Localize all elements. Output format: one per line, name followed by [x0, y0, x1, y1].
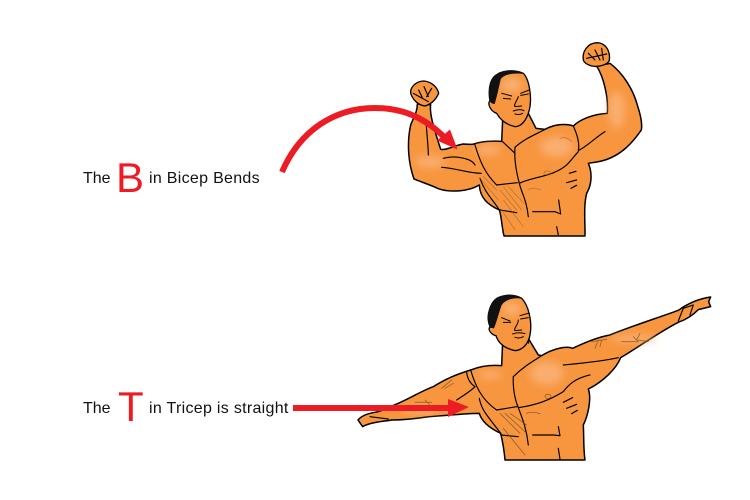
muscle lines — [413, 48, 607, 235]
highlights — [403, 334, 657, 413]
torso and arms silhouette — [408, 63, 642, 236]
caption: bicep — [83, 154, 260, 201]
caption: tricep: T — [118, 383, 144, 430]
caption: tricep: The — [83, 400, 111, 417]
hair — [488, 294, 523, 328]
vein and shading lines — [415, 333, 648, 455]
face highlight — [502, 78, 522, 92]
face features — [502, 90, 529, 115]
straight arrow to tricep — [293, 399, 469, 417]
highlights — [415, 92, 625, 168]
caption: bicep: B — [116, 154, 144, 201]
face highlight — [502, 302, 521, 316]
figure: bodybuilder with arms straight — [358, 294, 711, 460]
caption: tricep — [83, 383, 289, 430]
torso and straight arms silhouette — [358, 297, 711, 460]
caption: tricep: in Tricep is straight — [149, 400, 289, 417]
figure: bodybuilder flexing biceps — [408, 43, 642, 236]
caption: bicep: The — [83, 170, 111, 187]
hair — [489, 71, 524, 104]
head — [489, 71, 530, 127]
icon: right raised fist — [583, 43, 610, 66]
curved arrow to bicep — [282, 108, 458, 172]
face features — [502, 313, 530, 343]
head — [488, 294, 531, 351]
chest shading — [480, 138, 572, 230]
muscle lines — [370, 305, 693, 459]
icon: left raised fist — [411, 81, 439, 106]
caption: bicep: in Bicep Bends — [149, 170, 260, 187]
